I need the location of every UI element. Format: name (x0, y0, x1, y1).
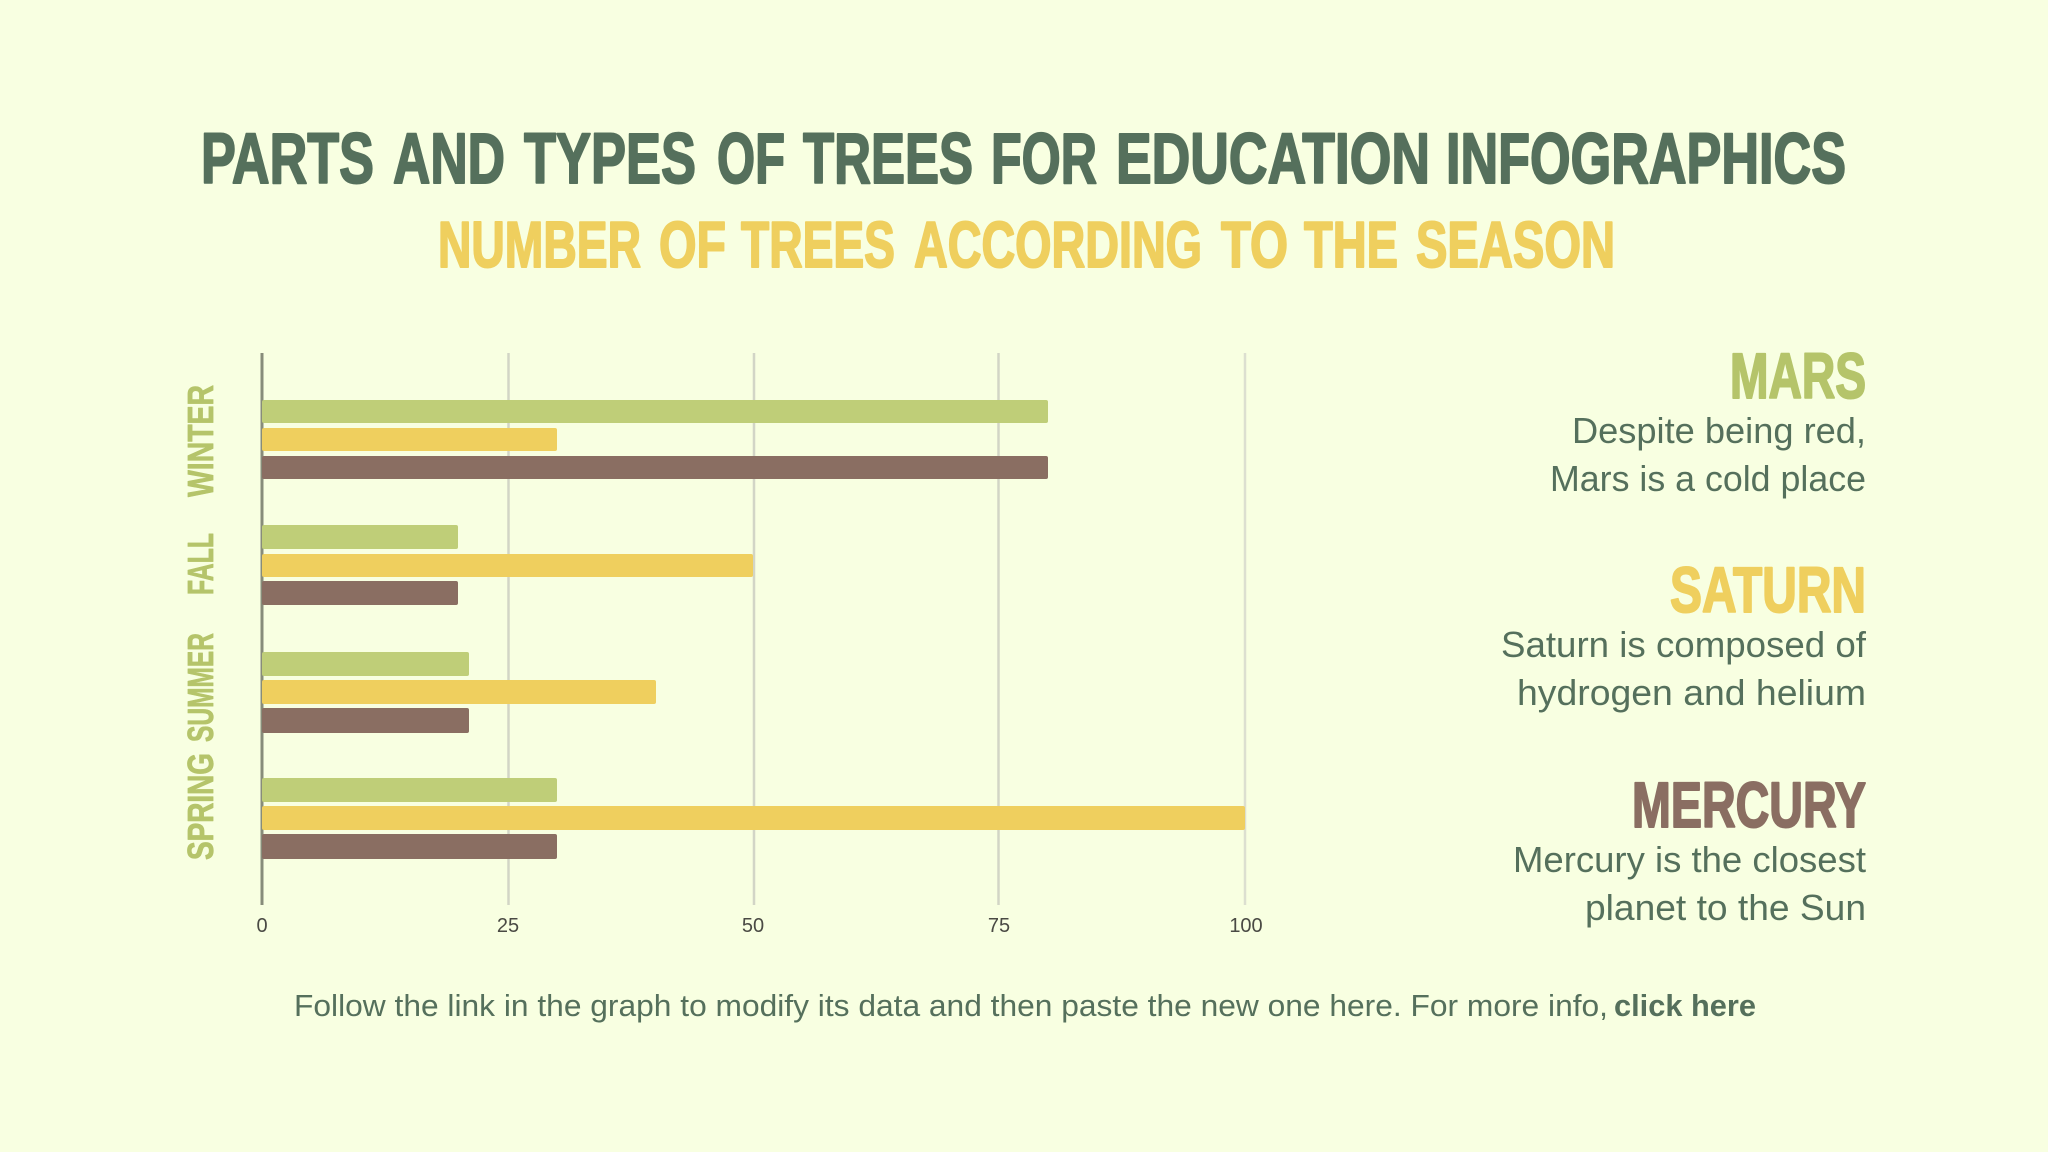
legend entry: saturn (1501, 554, 1867, 713)
description: saturn: Saturn is composed of (1501, 624, 1867, 665)
bars: summer (262, 652, 656, 733)
x axis tick labels: 25 (497, 915, 519, 937)
title: OF (717, 120, 785, 199)
x axis tick labels: 75 (988, 915, 1010, 937)
description: saturn (1501, 624, 1867, 713)
heading: saturn: SATURN (1670, 554, 1866, 626)
bar chart (180, 353, 1263, 937)
title: EDUCATION (1116, 120, 1430, 199)
x axis tick labels: 0 (256, 915, 268, 937)
subtitle: SEASON (1416, 208, 1615, 281)
legend entry: mercury (1513, 769, 1866, 928)
subtitle: TO (1221, 208, 1288, 281)
category labels: SUMMER (180, 633, 221, 742)
subtitle: ACCORDING (914, 208, 1202, 281)
description: mars: Mars is a cold place (1550, 458, 1866, 499)
title: TYPES (524, 120, 696, 199)
subtitle: THE (1304, 208, 1398, 281)
description: mars: Despite being red, (1572, 410, 1866, 451)
bars: spring (262, 778, 1245, 859)
footer note: Follow the link in the graph to modify its data and then paste the new one here. For more info, (294, 988, 1608, 1023)
x axis tick labels: 50 (742, 915, 764, 937)
bars: winter (262, 400, 1048, 479)
category labels: SPRING (180, 753, 221, 860)
gridlines and axis (262, 353, 1245, 905)
title: TREES (803, 120, 973, 199)
description: saturn: hydrogen and helium (1517, 672, 1866, 713)
subtitle: OF (659, 208, 726, 281)
x axis tick labels (256, 915, 1263, 937)
description: mercury: Mercury is the closest (1513, 839, 1866, 880)
title: INFOGRAPHICS (1446, 120, 1846, 199)
title: AND (393, 120, 505, 199)
bars: fall (262, 525, 753, 605)
category labels: FALL (180, 533, 221, 595)
subtitle (438, 208, 1615, 281)
heading: mercury: MERCURY (1632, 769, 1866, 841)
title (201, 120, 1846, 199)
subtitle: NUMBER (438, 208, 641, 281)
footer note: click here (1614, 988, 1756, 1023)
title: PARTS (201, 120, 374, 199)
description: mercury (1513, 839, 1866, 928)
legend entry: mars (1550, 340, 1866, 499)
subtitle: TREES (741, 208, 895, 281)
heading: mars: MARS (1730, 340, 1866, 412)
category labels: WINTER (180, 385, 221, 497)
description: mars (1550, 410, 1866, 499)
description: mercury: planet to the Sun (1585, 887, 1866, 928)
category labels (180, 385, 221, 860)
title: FOR (991, 120, 1097, 199)
x axis tick labels: 100 (1229, 915, 1263, 937)
